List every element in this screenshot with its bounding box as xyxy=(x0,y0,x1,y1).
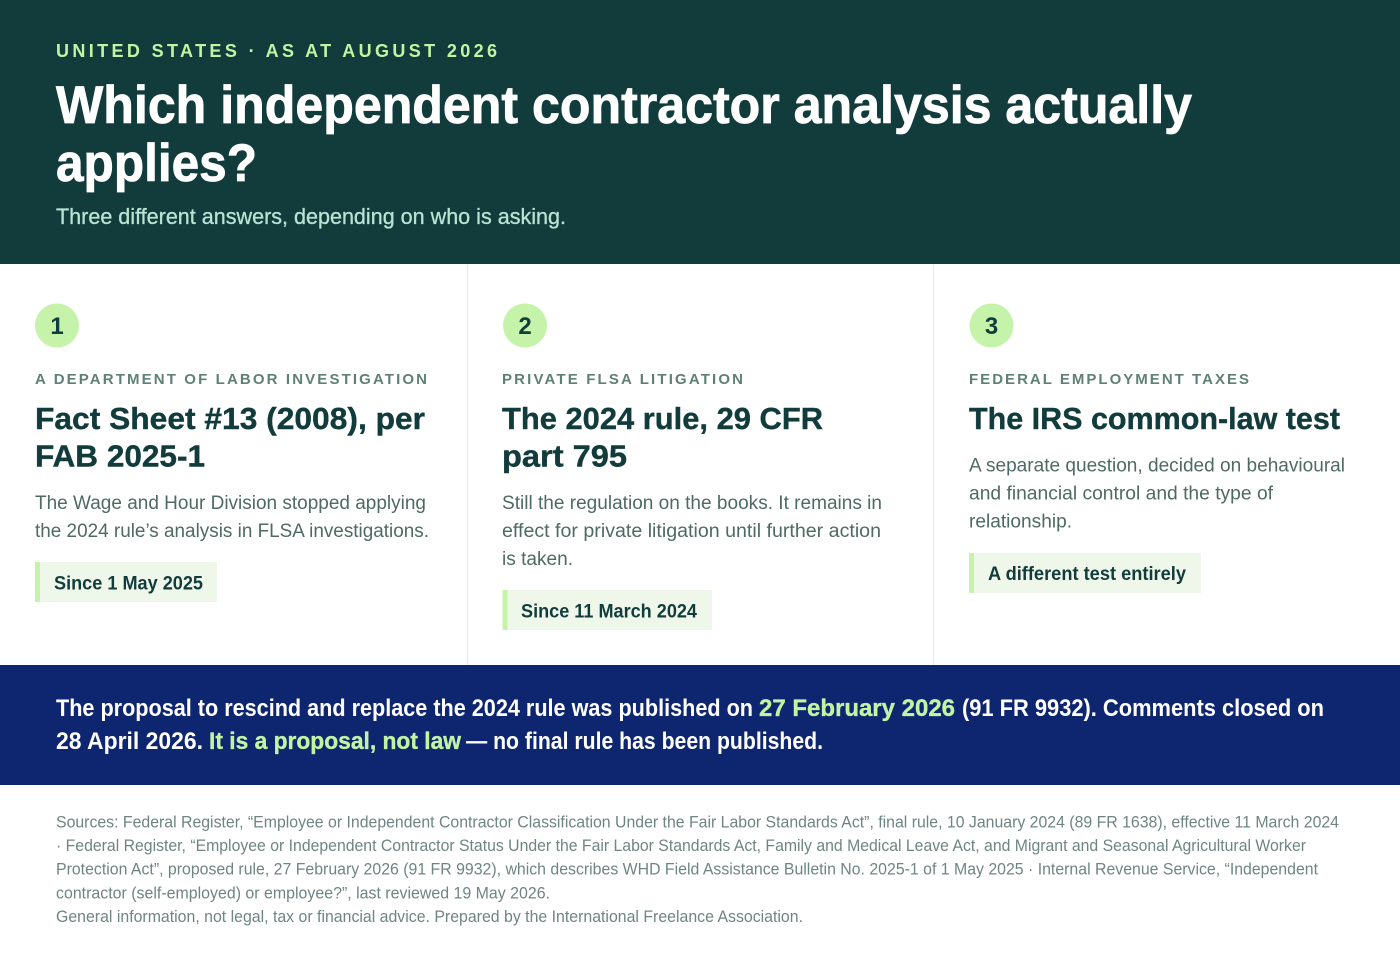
subtitle: Three different answers, depending on who is asking. xyxy=(56,204,566,229)
text block: sources and disclaimer: Protection Act”, proposed rule, 27 February 2026 (91 FR 9932), which describes WHD Field Assistance Bulletin No. 2025-1 of 1 May 2025 · Internal Revenue Service, “Independent xyxy=(56,860,1318,878)
column 3 label: FEDERAL EMPLOYMENT TAXES xyxy=(969,371,1249,388)
number badge 2 xyxy=(503,304,547,348)
panel: header xyxy=(0,0,1400,264)
column 1 heading: FAB 2025-1 xyxy=(35,438,205,474)
column 1 description: the 2024 rule’s analysis in FLSA investigations. xyxy=(35,521,429,542)
callout: proposal status banner: (91 FR 9932). Comments closed on xyxy=(962,695,1324,722)
column 1 description: The Wage and Hour Division stopped applying xyxy=(35,493,426,514)
callout: proposal status banner: It is a proposal, not law xyxy=(209,728,461,755)
text block: sources and disclaimer: · Federal Register, “Employee or Independent Contractor Status Under the Fair Labor Standards Act, Family and Medical Leave Act, and Migrant and Seasonal Agricultural Worker xyxy=(56,837,1306,855)
column 1 heading: Fact Sheet #13 (2008), per xyxy=(35,401,425,436)
title: Which independent contractor analysis actually xyxy=(56,76,1192,135)
column 2 date tag: Since 11 March 2024 xyxy=(521,602,697,622)
column 2 label: PRIVATE FLSA LITIGATION xyxy=(502,371,743,388)
column 1 date tag: Since 1 May 2025 xyxy=(54,574,203,594)
column 3 heading: The IRS common-law test xyxy=(969,401,1340,436)
text block: sources and disclaimer: contractor (self-employed) or employee?”, last reviewed 19 May 2026. xyxy=(56,884,550,902)
number badge 2: 2 xyxy=(518,313,532,340)
column 2 description: is taken. xyxy=(502,549,573,570)
column 3 tag xyxy=(969,553,1201,593)
number badge 3 xyxy=(970,304,1014,348)
column 1 description xyxy=(35,493,429,542)
title xyxy=(56,76,1192,193)
column 1 label: A DEPARTMENT OF LABOR INVESTIGATION xyxy=(35,371,427,388)
number badge 1: 1 xyxy=(50,313,64,340)
column 2 heading: part 795 xyxy=(502,438,627,474)
panel: column 3, federal employment taxes xyxy=(934,264,1400,665)
callout: proposal status banner xyxy=(0,665,1400,785)
text block: sources and disclaimer: Sources: Federal Register, “Employee or Independent Contractor Classification Under the Fair Labor Standards Act”, final rule, 10 January 2024 (89 FR 1638), effective 11 March 2024 xyxy=(56,814,1339,832)
callout: proposal status banner: 28 April 2026. xyxy=(56,728,203,755)
column 1 heading xyxy=(35,401,425,474)
column 2 heading: The 2024 rule, 29 CFR xyxy=(502,401,823,436)
column 2 description: Still the regulation on the books. It remains in xyxy=(502,493,882,514)
number badge 1 xyxy=(35,304,79,348)
eyebrow: location and date: UNITED STATES · AS AT AUGUST 2026 xyxy=(56,41,497,61)
column 2 heading xyxy=(502,401,823,474)
text block: sources and disclaimer xyxy=(56,814,1339,926)
column 3 tag: A different test entirely xyxy=(988,564,1186,585)
text block: sources and disclaimer: General information, not legal, tax or financial advice. Prepared by the International Freelance Association. xyxy=(56,908,803,926)
column 3 description: A separate question, decided on behavioural xyxy=(969,456,1345,476)
column 3 description: relationship. xyxy=(969,512,1072,532)
column 1 date tag xyxy=(35,562,217,602)
panel: column 1, Department of Labor investigation xyxy=(0,264,468,665)
callout: proposal status banner: 27 February 2026 xyxy=(759,695,955,722)
column 3 description: and financial control and the type of xyxy=(969,484,1274,504)
panel: column 2, private FLSA litigation xyxy=(468,264,934,665)
column 2 description: effect for private litigation until further action xyxy=(502,521,881,542)
number badge 3: 3 xyxy=(985,313,998,340)
column 3 description xyxy=(969,456,1345,532)
title: applies? xyxy=(56,134,257,193)
callout: proposal status banner: The proposal to rescind and replace the 2024 rule was published on xyxy=(56,695,753,722)
column 2 description xyxy=(502,493,882,570)
callout: proposal status banner: — no final rule has been published. xyxy=(466,728,823,755)
column 2 date tag xyxy=(502,590,712,630)
